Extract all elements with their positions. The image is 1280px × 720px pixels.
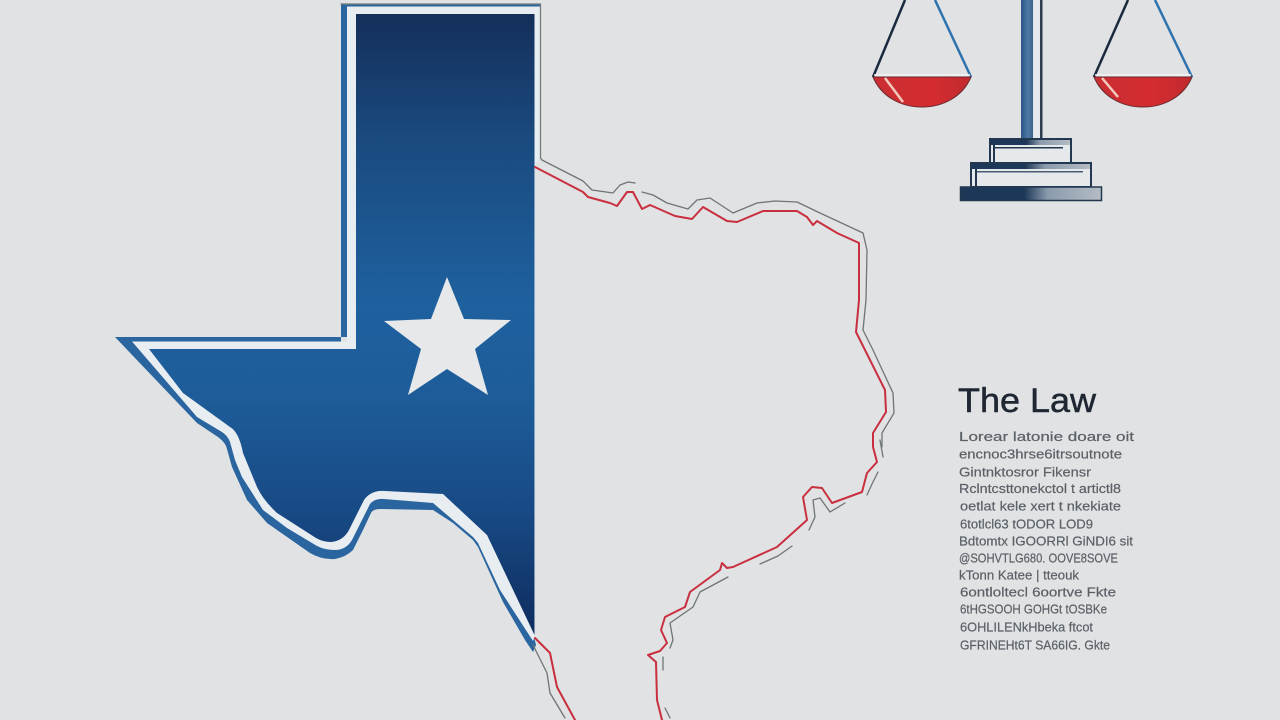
right pan strings	[1094, 0, 1192, 77]
body copy: 6tHGSOOH GOHGt tOSBKe	[960, 602, 1107, 616]
right pan	[1094, 75, 1192, 107]
base tier 3	[960, 187, 1102, 200]
base tier 1	[990, 139, 1071, 163]
body copy: encnoc3hrse6itrsoutnote	[959, 446, 1122, 462]
text block	[958, 382, 1135, 652]
scales of justice	[873, 0, 1192, 200]
texas map: blue half	[115, 4, 541, 652]
body copy: kTonn Katee | tteouk	[959, 568, 1079, 582]
star	[384, 277, 511, 395]
body copy: 6totlcl63 tODOR LOD9	[960, 516, 1093, 532]
body copy: 6ontloltecl 6oortve Fkte	[960, 584, 1116, 600]
body copy: Lorear latonie doare oit	[959, 429, 1135, 444]
body copy	[959, 429, 1135, 652]
texas map: gray outer outline	[341, 4, 894, 718]
blue gradient fill	[149, 14, 534, 635]
heading: The Law	[958, 382, 1096, 420]
body copy: Rclntcsttonekctol t artictl8	[959, 481, 1121, 496]
body copy: Gintnktosror Fikensr	[959, 464, 1092, 480]
outer blue border band	[115, 4, 541, 652]
pole	[1021, 0, 1042, 139]
body copy: Bdtomtx IGOORRl GiNDI6 sit	[959, 534, 1133, 548]
body copy: GFRINEHt6T SA66IG. Gkte	[960, 638, 1110, 652]
white inner outline	[132, 6, 540, 641]
texas map: red outline	[535, 167, 886, 720]
body copy: 6OHLILENkHbeka ftcot	[960, 620, 1093, 634]
left pan	[873, 75, 971, 107]
body copy: oetlat kele xert t nkekiate	[960, 498, 1121, 514]
body copy: @SOHVTLG680. OOVE8SOVE	[959, 550, 1118, 566]
base tier 2	[971, 163, 1091, 187]
left pan strings	[873, 0, 971, 77]
